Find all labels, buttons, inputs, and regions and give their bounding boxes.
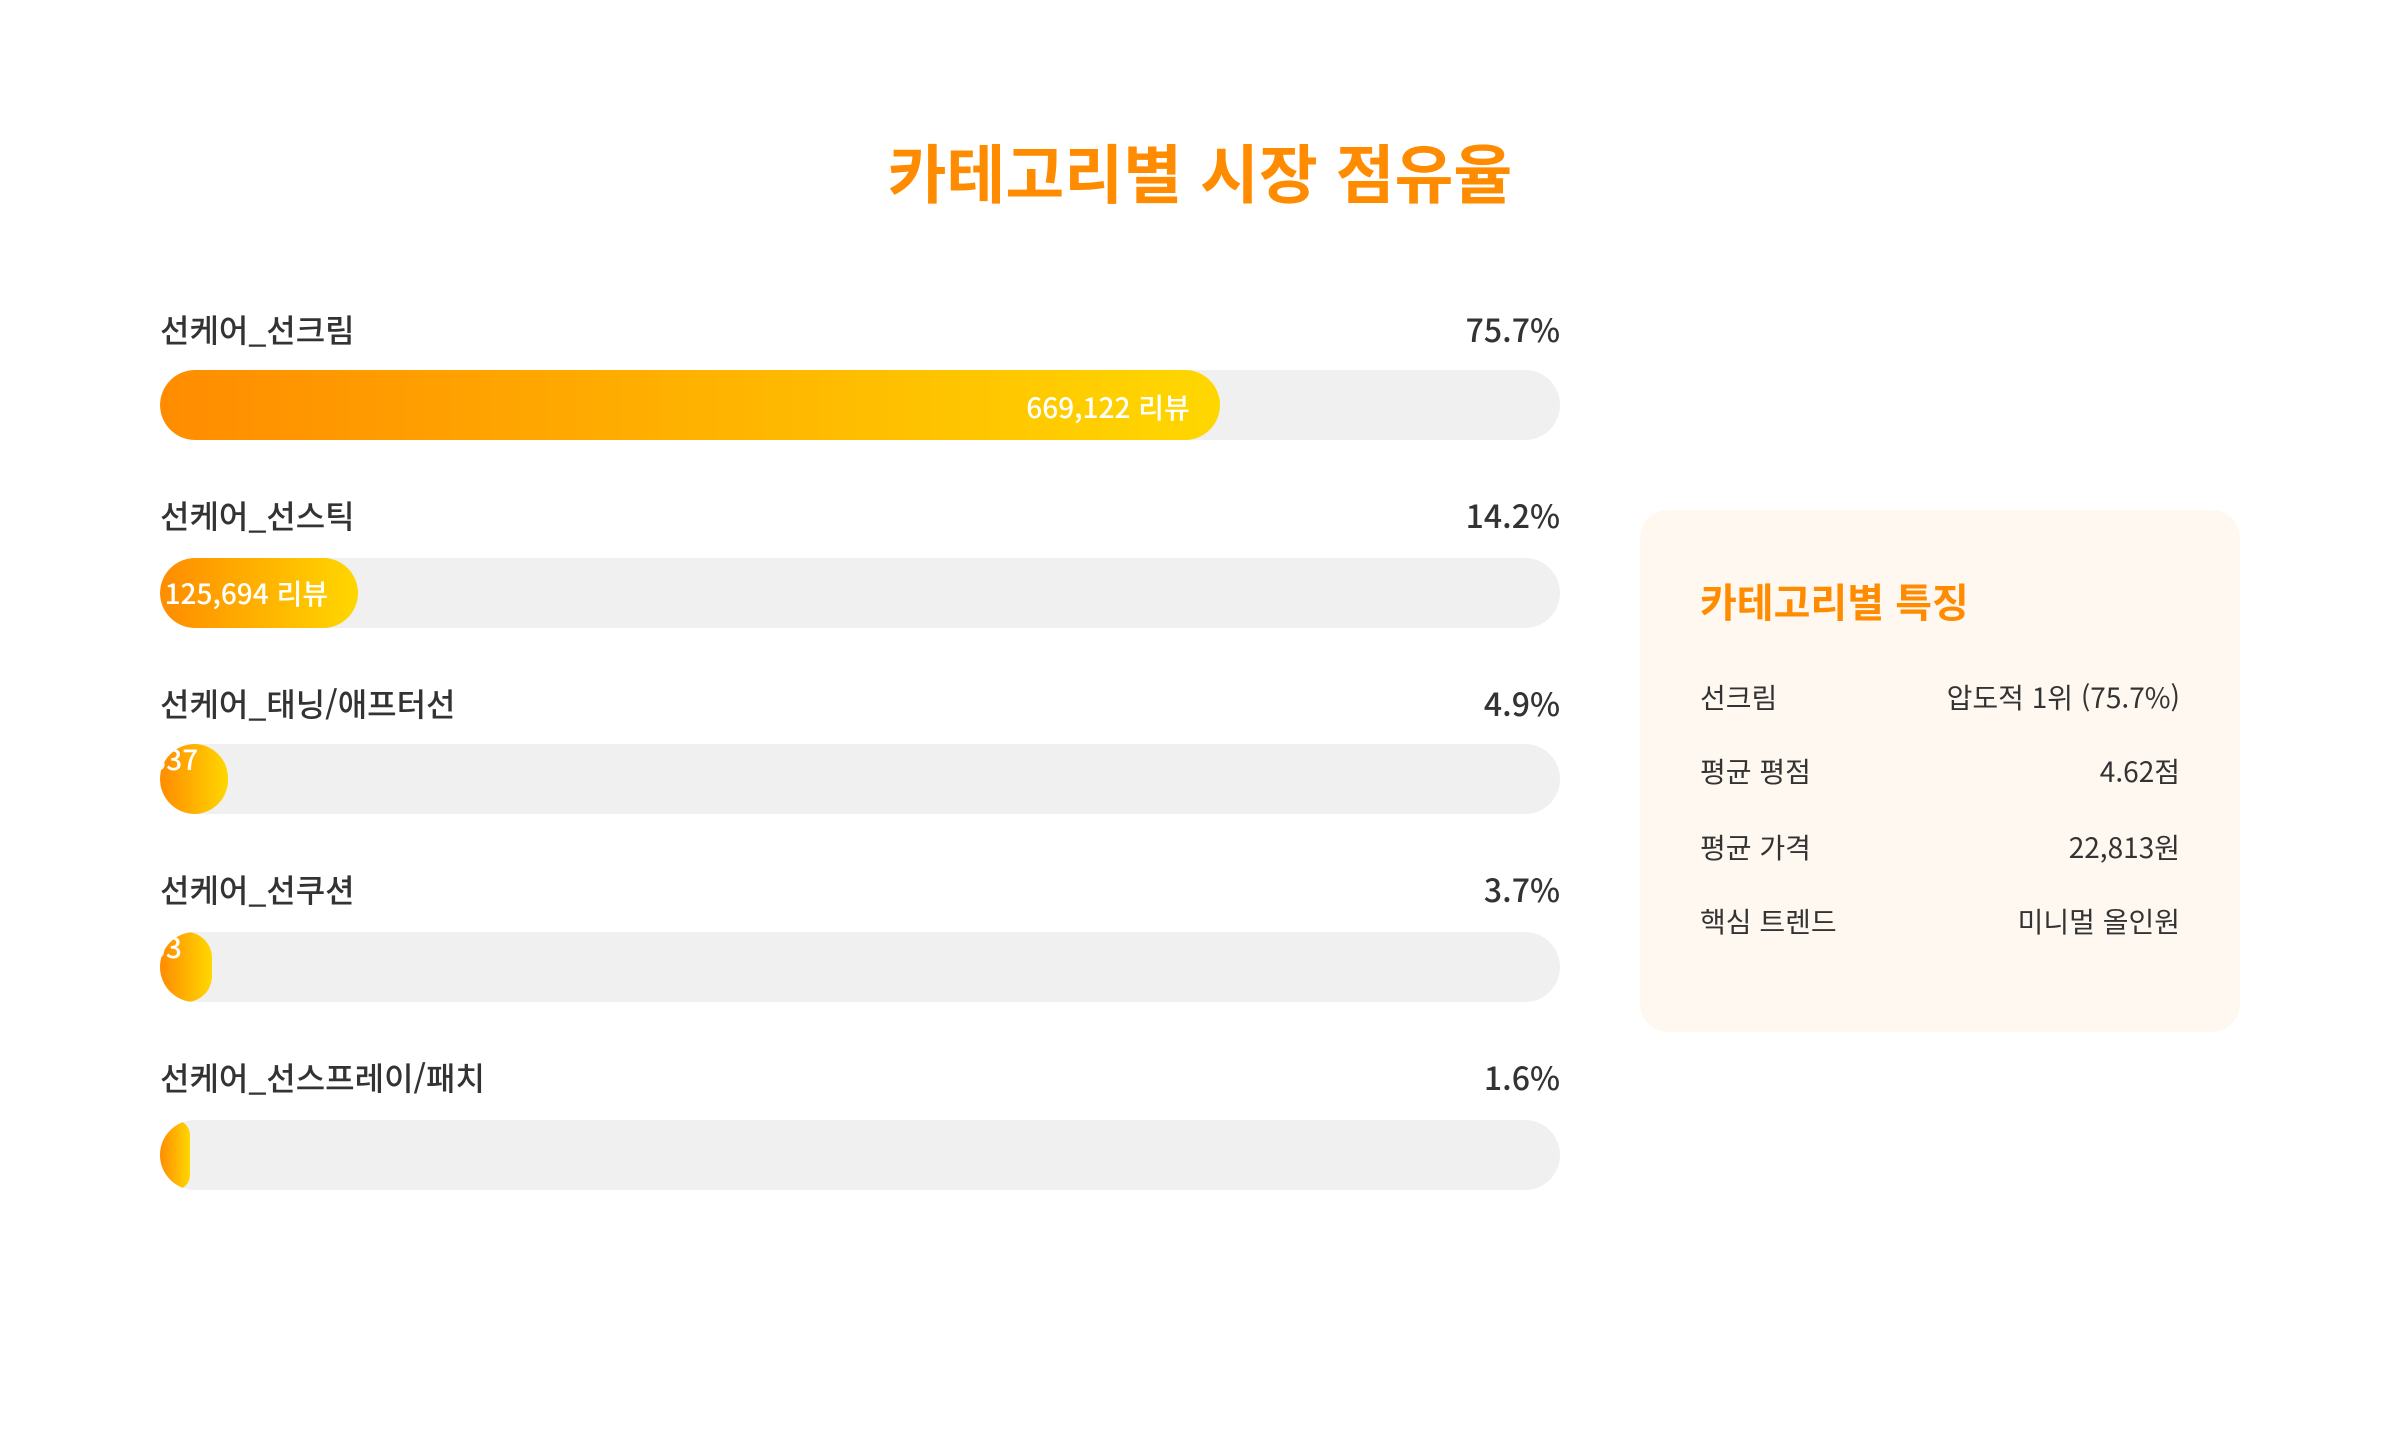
- bar track: 태닝/애프터선: [160, 744, 1560, 814]
- label and share: 선크림: [160, 306, 1560, 352]
- title: 카테고리별 시장 점유율: [888, 125, 1512, 217]
- feature row: 선크림: 선크림: [1700, 677, 1777, 717]
- label and share: 선쿠션: 선케어_선쿠션: [160, 866, 355, 912]
- bar row: 선케어_태닝/애프터선 4.9%: [160, 680, 1560, 814]
- feature row: 평균 평점: 4.62점: [2100, 751, 2180, 791]
- label and share: 태닝/애프터선: 선케어_태닝/애프터선: [160, 680, 456, 726]
- label and share: 선크림: 선케어_선크림: [160, 306, 355, 352]
- label and share: 선스프레이/패치: 선케어_선스프레이/패치: [160, 1054, 485, 1100]
- bar row: 선케어_선스프레이/패치 1.6%: [160, 1054, 1560, 1190]
- feature row: 평균 가격: [1700, 827, 2180, 867]
- bar row: 선케어_선스틱 14.2%: [160, 492, 1560, 628]
- label and share: 선스틱: 14.2%: [1466, 492, 1560, 538]
- label and share: 선쿠션: [160, 866, 1560, 912]
- panel heading: 카테고리별 특징: [1700, 571, 1969, 629]
- label and share: 선쿠션: 3.7%: [1484, 866, 1560, 912]
- label and share: 선스틱: 선케어_선스틱: [160, 492, 355, 538]
- bar track: 선스틱: 125,694 리뷰: [165, 573, 328, 613]
- feature row: 핵심 트렌드: [1700, 901, 2180, 941]
- feature row: 선크림: [1700, 677, 2180, 717]
- feature row: 핵심 트렌드: 미니멀 올인원: [2018, 901, 2180, 941]
- feature row: 핵심 트렌드: 핵심 트렌드: [1700, 901, 1837, 941]
- feature row: 평균 평점: [1700, 751, 2180, 791]
- feature row: 평균 가격: 22,813원: [2069, 827, 2180, 867]
- feature row: 평균 평점: 평균 평점: [1700, 751, 1811, 791]
- bar track: 선스틱: [160, 558, 1560, 628]
- bar row: 선케어_선쿠션 3.7%: [160, 866, 1560, 1002]
- label and share: 선스틱: [160, 492, 1560, 538]
- bar row: 선케어_선크림 75.7%: [160, 306, 1560, 440]
- feature row: 평균 가격: 평균 가격: [1700, 827, 1811, 867]
- bar track: 선크림: [160, 370, 1560, 440]
- feature row: 선크림: 압도적 1위 (75.7%): [1947, 677, 2180, 717]
- bar track: 선스프레이/패치: [160, 1120, 1560, 1190]
- panel: category features: [1640, 510, 2240, 1032]
- label and share: 선스프레이/패치: 1.6%: [1484, 1054, 1560, 1100]
- bar track: 선쿠션: [160, 932, 1560, 1002]
- bar track: 선크림: 669,122 리뷰: [1026, 387, 1190, 427]
- label and share: 태닝/애프터선: 4.9%: [1484, 680, 1560, 726]
- label and share: 선크림: 75.7%: [1466, 306, 1560, 352]
- label and share: 태닝/애프터선: [160, 680, 1560, 726]
- label and share: 선스프레이/패치: [160, 1054, 1560, 1100]
